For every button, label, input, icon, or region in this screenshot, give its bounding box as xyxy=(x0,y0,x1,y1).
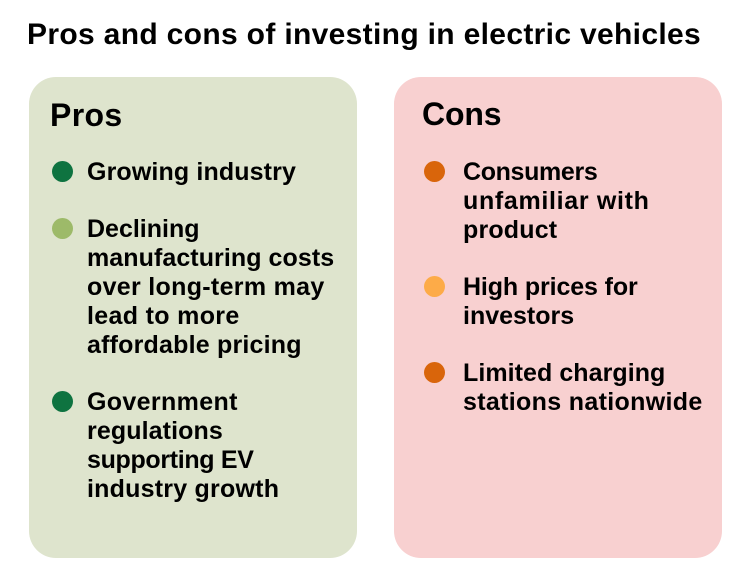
panel: pros xyxy=(29,77,357,558)
con: limited charging: Limited charging xyxy=(463,359,665,387)
pro: government regulations: supporting EV xyxy=(87,446,254,474)
pro: declining manufacturing costs: over long-term may xyxy=(87,273,325,301)
con: high prices: investors xyxy=(463,302,574,330)
con: consumers unfamiliar: Consumers xyxy=(463,158,597,186)
pro: declining manufacturing costs: affordable pricing xyxy=(87,331,302,359)
bullet icon: government regulations xyxy=(52,391,73,412)
pro: growing industry: Growing industry xyxy=(87,158,296,186)
pro: government regulations xyxy=(87,388,279,503)
heading: cons: Cons xyxy=(422,96,501,132)
con: high prices xyxy=(463,273,638,330)
con: high prices: High prices for xyxy=(463,273,638,301)
pro: declining manufacturing costs: Declining xyxy=(87,215,200,243)
con: consumers unfamiliar: unfamiliar with xyxy=(463,187,650,215)
pro: declining manufacturing costs: lead to more xyxy=(87,302,240,330)
heading: pros: Pros xyxy=(50,97,123,133)
bullet icon: high prices xyxy=(424,276,445,297)
pro: government regulations: regulations xyxy=(87,417,223,445)
pro: government regulations: Government xyxy=(87,388,238,416)
pro: government regulations: industry growth xyxy=(87,475,279,503)
pro: declining manufacturing costs xyxy=(87,215,334,359)
bullet icon: consumers unfamiliar xyxy=(424,161,445,182)
bullet icon: declining costs xyxy=(52,218,73,239)
bullet icon: growing industry xyxy=(52,161,73,182)
con: limited charging xyxy=(463,359,703,416)
bullet icon: limited charging xyxy=(424,362,445,383)
con: consumers unfamiliar xyxy=(463,158,650,244)
title: Pros and cons of investing in electric vehicles xyxy=(27,18,701,51)
con: limited charging: stations nationwide xyxy=(463,388,703,416)
con: consumers unfamiliar: product xyxy=(463,216,557,244)
panel: cons xyxy=(394,77,722,558)
pro: declining manufacturing costs: manufacturing costs xyxy=(87,244,334,272)
